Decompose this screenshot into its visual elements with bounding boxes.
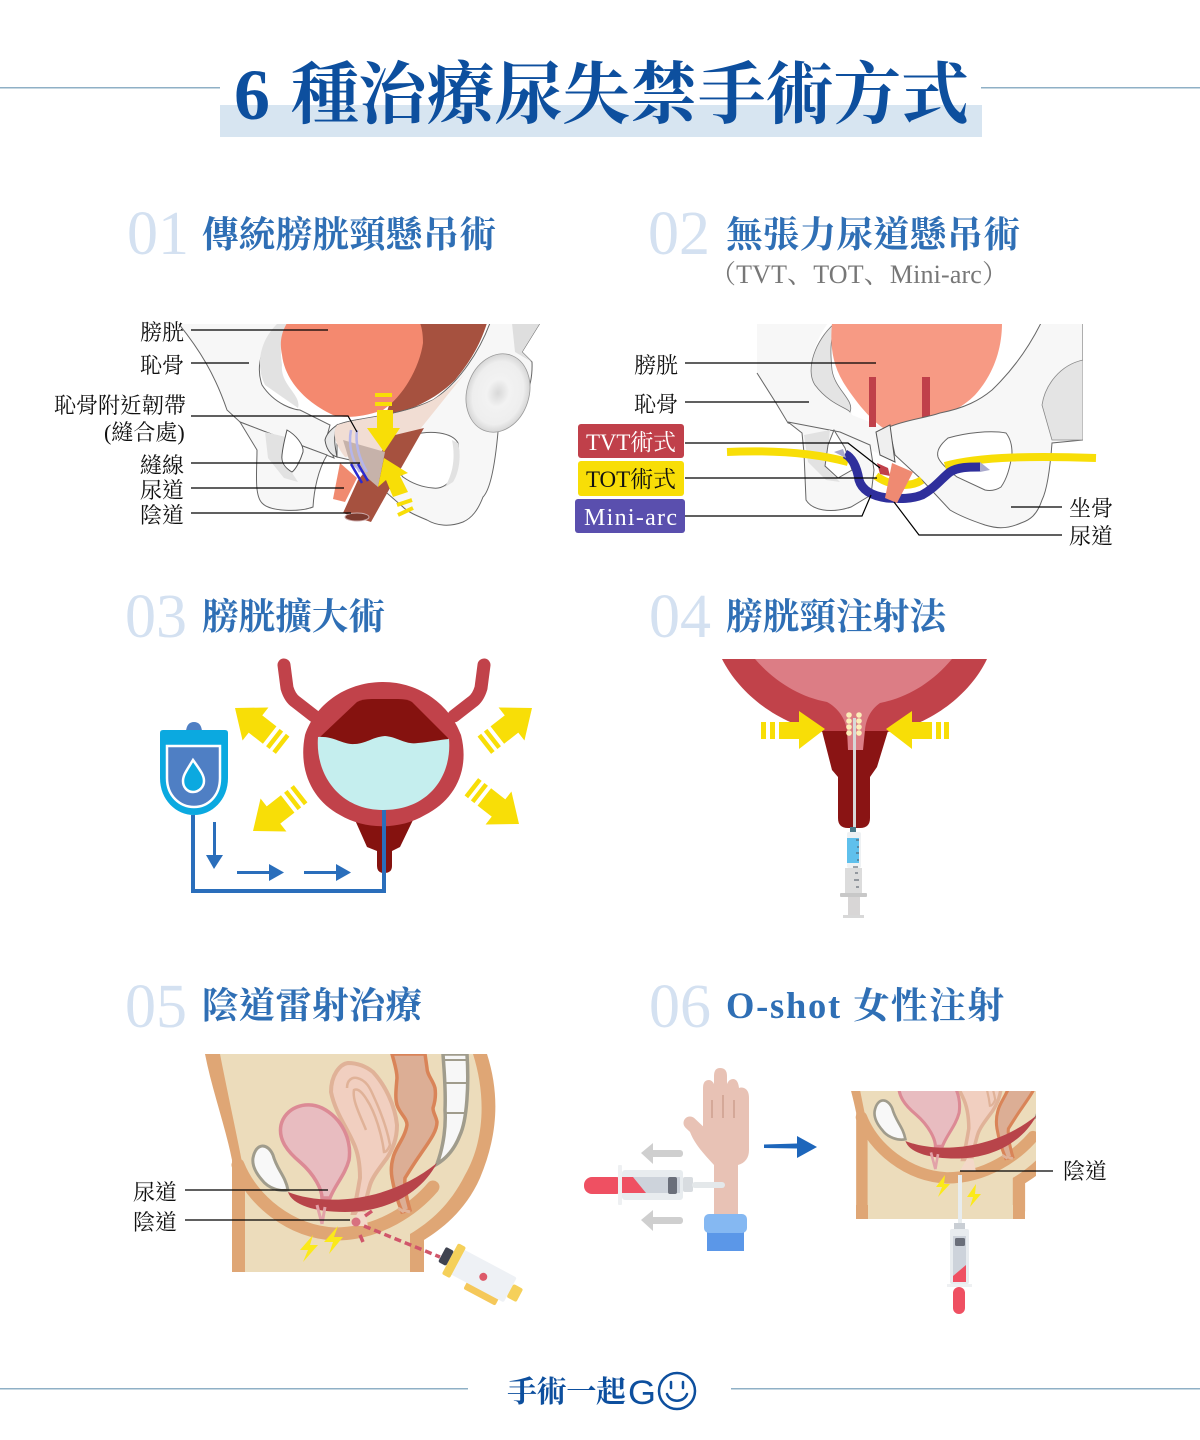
pelvic anatomy cross-section (205, 1054, 495, 1272)
label: bladder: 膀胱 (140, 320, 184, 345)
right pelvis bone (337, 323, 540, 525)
leader lines (185, 1190, 350, 1220)
symphysis (325, 425, 337, 457)
left pelvis bone (178, 323, 334, 458)
icon: hand and arm (690, 1068, 749, 1251)
heading 05: 05 (125, 973, 187, 1041)
arrow up-left (222, 691, 296, 762)
TOT tape (727, 451, 1096, 485)
arrow left (761, 711, 825, 749)
bladder wall (722, 659, 987, 732)
title: 6 (234, 55, 270, 135)
urethral sphincter (822, 731, 888, 828)
footer text: 手術一起 (507, 1376, 626, 1409)
leader line (960, 1170, 1053, 1172)
inner lumen (755, 659, 952, 750)
icon: injection syringe (947, 1175, 972, 1314)
label: suture: 縫線 (140, 453, 184, 478)
heading 06: O-shot 女性注射 (726, 985, 1004, 1026)
heading 05 (125, 973, 424, 1041)
label: ischium: 坐骨 (1069, 496, 1113, 521)
label: urethra: 尿道 (133, 1180, 177, 1205)
label: vagina: 陰道 (1063, 1159, 1107, 1184)
pink overlay (335, 372, 466, 457)
lightning bolts (300, 1226, 343, 1262)
panel: bladder augmentation diagram (160, 665, 545, 891)
mini anatomy diagram (851, 1091, 1036, 1219)
right pelvis (889, 323, 1083, 528)
TVT end (877, 463, 890, 476)
arrow (764, 1136, 817, 1158)
heading 06 (649, 973, 1004, 1041)
heading 02: 02 (648, 200, 710, 268)
badge: Mini-arc: Mini-arc (584, 505, 677, 531)
heading 03: 膀胱擴大術 (202, 596, 385, 637)
needle (853, 718, 856, 828)
laser device (432, 1239, 528, 1314)
heading 04: 04 (649, 583, 711, 651)
Mini-arc tape (845, 454, 980, 499)
vagina tube (343, 428, 424, 522)
panel: tension-free urethral sling diagram (575, 323, 1113, 549)
heading 04: 膀胱頸注射法 (726, 596, 948, 637)
label: urethra: 尿道 (1069, 524, 1113, 549)
left pelvis (757, 323, 888, 458)
label: vagina: 陰道 (140, 503, 184, 528)
heading 02 (648, 200, 1020, 289)
bladder (284, 665, 484, 873)
icon: blood-draw syringe (584, 1165, 725, 1205)
rear dark tissue (385, 323, 487, 418)
urethra (885, 463, 913, 503)
label: vagina: 陰道 (133, 1210, 177, 1235)
icon: smiley (659, 1373, 695, 1409)
label: urethra: 尿道 (140, 478, 184, 503)
panel: O-shot diagram (584, 1068, 1106, 1314)
obturator hole (401, 432, 459, 489)
badge: TOT (578, 461, 684, 496)
icon: saline bag (160, 722, 228, 815)
urethra (333, 463, 357, 502)
panel: bladder neck injection diagram (722, 659, 987, 918)
label: pubic bone: 恥骨 (140, 353, 184, 378)
heading 03 (125, 583, 385, 651)
bladder (831, 323, 1002, 432)
heading 02: （TVT、TOT、Mini-arc） (710, 260, 1008, 289)
hip socket (466, 353, 530, 433)
label: suture site: (縫合處) (104, 420, 185, 445)
heading 03: 03 (125, 583, 187, 651)
footer (0, 1373, 1200, 1412)
lightning bolts (936, 1175, 981, 1207)
panel: vaginal laser diagram (133, 1054, 528, 1314)
heading 04 (649, 583, 948, 651)
badge: TOT: TOT術式 (586, 467, 676, 492)
injected filler dots (846, 712, 862, 736)
title (0, 55, 1200, 137)
label: pubic bone: 恥骨 (634, 392, 678, 417)
leader lines (191, 330, 360, 513)
laser beam (352, 1211, 440, 1257)
arrow right (886, 711, 949, 749)
badge: Mini-arc (575, 499, 685, 533)
arrows (367, 410, 400, 452)
panel: traditional bladder neck suspension diagram (54, 320, 540, 528)
heading 06: 06 (649, 973, 711, 1041)
heading 01: 01 (127, 200, 189, 268)
heading 05: 陰道雷射治療 (202, 985, 424, 1026)
tube and flow arrows (193, 810, 384, 891)
heading 01: 傳統膀胱頸懸吊術 (202, 214, 496, 255)
badge: TVT: TVT術式 (586, 430, 676, 455)
title: 種治療尿失禁手術方式 (291, 57, 969, 133)
icon: grey arrows (641, 1143, 683, 1231)
arrow down-left (240, 777, 314, 848)
badge: TVT (578, 424, 684, 458)
label: bladder: 膀胱 (634, 353, 678, 378)
sutures (350, 430, 367, 472)
arrow down-right (458, 770, 532, 841)
arrow up-right (471, 691, 545, 762)
bladder (281, 323, 423, 417)
label: ligament: 恥骨附近韌帶 (54, 393, 186, 418)
leader lines (685, 363, 1062, 535)
grey overlay (343, 440, 385, 487)
syringe (840, 827, 867, 918)
heading 02: 無張力尿道懸吊術 (726, 214, 1020, 255)
footer G: G (628, 1374, 656, 1412)
heading 01 (127, 200, 496, 268)
